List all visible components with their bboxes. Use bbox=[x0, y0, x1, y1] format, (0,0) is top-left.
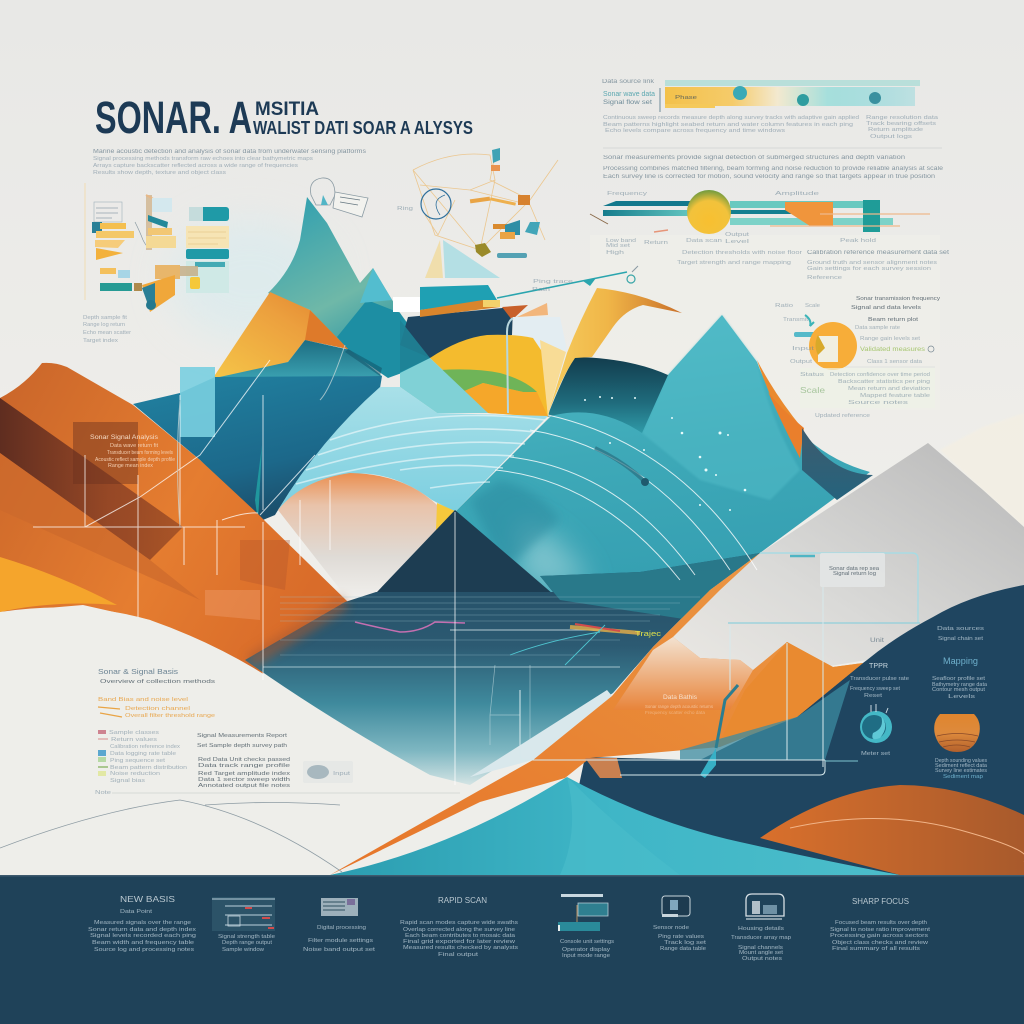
lower left text panel: Detection channel bbox=[125, 706, 190, 712]
left chart caption: Depth sample fit bbox=[83, 315, 128, 321]
title bbox=[95, 92, 473, 143]
lower centre text block: Red Target amplitude index bbox=[198, 771, 290, 777]
right column text on navy: Seafloor profile set bbox=[932, 676, 986, 682]
footer column 4: Final output bbox=[438, 952, 479, 958]
top right timeline bar: Phase bbox=[675, 95, 697, 101]
navy triangle bbox=[377, 510, 553, 594]
footer column 1: Measured signals over the range bbox=[94, 920, 191, 926]
bar labels: Amplitude bbox=[775, 191, 819, 197]
lower centre text block: Annotated output file notes bbox=[198, 783, 290, 789]
footer icon 3: dashboard: Noise band output set bbox=[303, 947, 376, 953]
orange mountain caption bbox=[90, 435, 175, 469]
lower left legend list bbox=[95, 730, 460, 796]
sonar arcs with particles bbox=[495, 396, 757, 580]
orange globe callout: Signal and data levels bbox=[851, 305, 921, 311]
upper mountain cluster bbox=[213, 197, 432, 378]
left chart caption: Range log return bbox=[83, 322, 125, 328]
sphere caption: Survey line estimates bbox=[935, 768, 987, 774]
top right timeline bar: Sonar wave data bbox=[603, 91, 655, 98]
sphere caption: Sediment map bbox=[943, 774, 983, 780]
orange mountain caption: Transducer beam forming levels bbox=[107, 450, 173, 456]
lower left text panel: Band Bias and noise level bbox=[98, 697, 188, 703]
lower left text panel: Sonar & Signal Basis bbox=[98, 667, 178, 676]
scatter thumbnail bbox=[303, 761, 353, 783]
sphere caption: Depth sounding values bbox=[935, 758, 987, 764]
orange panel caption: Data Bathis bbox=[663, 695, 697, 701]
icon: ocean sphere bbox=[934, 714, 980, 752]
footer column 4: RAPID SCAN bbox=[438, 896, 487, 905]
lower right annotation bbox=[800, 368, 935, 419]
footer column 8 bbox=[830, 897, 931, 952]
right summary text: Processing combines matched filtering, beam forming and noise reduction to provide reliable analysis at scale bbox=[603, 166, 944, 172]
footer icon 2: data screen: Signal strength table bbox=[218, 934, 275, 940]
dark scan panel bbox=[245, 553, 760, 785]
orange globe callout: Data sample rate bbox=[855, 325, 900, 331]
orange globe callout: Scale bbox=[805, 303, 820, 309]
footer icon 3: dashboard: Digital processing bbox=[317, 925, 366, 931]
footer column 4: Rapid scan modes capture wide swaths bbox=[400, 920, 518, 926]
orange globe callout: Input bbox=[792, 346, 815, 352]
network diagram bbox=[397, 148, 558, 278]
orange panel caption: Frequency scatter echo data bbox=[645, 710, 706, 715]
orange globe callout: Class 1 sensor data bbox=[867, 359, 922, 365]
lower right annotation: Source notes bbox=[848, 400, 909, 406]
footer column 8: Processing gain across sectors bbox=[830, 933, 928, 939]
right column text on navy: Mapping bbox=[943, 656, 978, 666]
bar labels: Return bbox=[644, 240, 668, 246]
footer column 1 bbox=[88, 895, 196, 953]
footer column 4: Overlap corrected along the survey line bbox=[403, 927, 515, 933]
footer icon 2: data screen: Depth range output bbox=[222, 940, 273, 946]
lower left legend list: Noise reduction bbox=[110, 771, 160, 777]
orange panel caption bbox=[645, 695, 714, 715]
lower right annotation: Status bbox=[800, 372, 825, 378]
footer icon 3: dashboard bbox=[303, 898, 376, 953]
lower left legend list: Ping sequence set bbox=[110, 758, 166, 764]
right column text on navy bbox=[932, 626, 987, 700]
title: WALIST DATI SOAR A ALYSYS bbox=[253, 118, 473, 138]
orange globe callout: Beam return plot bbox=[868, 317, 919, 323]
glass callout box bbox=[820, 553, 885, 587]
glass callout box: Sonar data rep sea bbox=[829, 566, 880, 572]
lower right annotation: Backscatter statistics per ping bbox=[838, 379, 930, 385]
footer icon 5: console bbox=[558, 894, 614, 959]
grey right panel bbox=[620, 443, 1024, 700]
intro text block: Arrays capture backscatter reflected across a wide range of frequencies bbox=[93, 163, 299, 169]
orange mountain caption: Data wave return fit bbox=[110, 443, 159, 449]
lower left legend list: Signal bias bbox=[110, 778, 146, 784]
lower right annotation: Mean return and deviation bbox=[848, 386, 930, 392]
probe arrow to ribbon bbox=[497, 266, 638, 298]
right teal mountain and central teal field bbox=[380, 315, 873, 640]
icon: gauge bbox=[860, 704, 892, 757]
footer column 1: Sonar return data and depth index bbox=[88, 927, 196, 933]
footer column 8: SHARP FOCUS bbox=[852, 897, 909, 906]
left column text on navy: Reset bbox=[864, 693, 883, 699]
deep blue shape and light rectangle bbox=[133, 367, 382, 522]
right column text on navy: Data sources bbox=[937, 626, 984, 632]
left chart caption: Target index bbox=[83, 338, 119, 344]
lower right annotation: Scale bbox=[800, 386, 826, 395]
top right paragraph: Continuous sweep records measure depth along survey tracks with adaptive gain applied bbox=[603, 115, 859, 121]
scatter thumbnail: Input bbox=[333, 771, 351, 777]
measurement lines bbox=[33, 345, 455, 785]
footer icon 3: dashboard: Filter module settings bbox=[308, 938, 373, 944]
right column text on navy: Levels bbox=[948, 694, 976, 700]
probe arrow to ribbon: Path bbox=[532, 287, 550, 293]
orange globe callout: Transmit bbox=[783, 317, 809, 323]
footer icon 5: console: Input mode range bbox=[562, 953, 610, 959]
probe arrow to ribbon: Ping trace bbox=[533, 279, 573, 285]
footer icon 7: chamber: Mount angle set bbox=[739, 950, 784, 956]
footer column 8: Focused beam results over depth bbox=[835, 920, 927, 926]
chart cluster upper left bbox=[85, 183, 229, 312]
intro text block bbox=[93, 149, 366, 176]
network diagram: Ring bbox=[397, 206, 413, 212]
navy region right bbox=[560, 585, 1024, 875]
icon: gauge: Meter set bbox=[861, 751, 891, 757]
right column text on navy: Contour mesh output bbox=[932, 687, 986, 693]
orange globe callout: Validated measures bbox=[860, 347, 925, 353]
orange globe callout: Sonar transmission frequency bbox=[856, 296, 940, 302]
title: MSITIA bbox=[255, 99, 319, 120]
bar labels: Data scan bbox=[686, 238, 722, 244]
top right paragraph: Track bearing offsets bbox=[866, 121, 937, 127]
left chart caption bbox=[83, 315, 131, 344]
bar labels: Level bbox=[725, 239, 749, 245]
orange hill bottom right bbox=[760, 785, 1024, 875]
footer icon 6: tablet: Sensor node bbox=[653, 925, 689, 931]
footer icon 5: console: Console unit settings bbox=[560, 939, 614, 945]
top right paragraph bbox=[603, 115, 938, 140]
footer column 8: Final summary of all results bbox=[832, 946, 920, 952]
orange mountain caption: Sonar Signal Analysis bbox=[90, 435, 158, 441]
lower right annotation: Mapped feature table bbox=[860, 393, 930, 399]
teal hill bottom bbox=[330, 777, 900, 875]
top right paragraph: Echo levels compare across frequency and time windows bbox=[605, 128, 786, 134]
lower right annotation: Updated reference bbox=[815, 413, 870, 419]
lower left text panel: Overview of collection methods bbox=[100, 679, 215, 685]
footer column 8: Object class checks and review bbox=[832, 940, 928, 946]
light blue wave band bbox=[278, 387, 548, 512]
white hill lower left bbox=[0, 608, 480, 875]
bar labels: Peak hold bbox=[840, 238, 876, 244]
footer icon 7: chamber: Housing details bbox=[738, 926, 784, 932]
panel labels on grey: Unit bbox=[870, 638, 884, 644]
right summary text bbox=[603, 155, 944, 180]
right column text on navy: Bathymetry range data bbox=[932, 682, 987, 688]
intro text block: Results show depth, texture and object class bbox=[93, 170, 227, 176]
yellow dome corner bbox=[436, 503, 455, 530]
lower right annotation: Detection confidence over time period bbox=[830, 372, 930, 378]
lower centre text block: Signal Measurements Report bbox=[197, 733, 288, 739]
divider bbox=[603, 147, 942, 149]
footer icon 2: data screen: Sample window bbox=[222, 947, 264, 953]
orange mountain caption: Range mean index bbox=[108, 463, 154, 469]
footer column 1: Beam width and frequency table bbox=[92, 940, 194, 946]
large orange mountain left bbox=[0, 363, 348, 680]
lower left legend list: Note bbox=[95, 790, 111, 796]
bar labels: High bbox=[606, 250, 624, 256]
lower centre text block: Data track range profile bbox=[198, 763, 290, 769]
footer icon 7: chamber: Transducer array map bbox=[731, 935, 791, 941]
bar labels bbox=[606, 191, 949, 281]
yellow dome and ribbon bbox=[400, 288, 682, 417]
bar labels: Reference bbox=[807, 275, 842, 281]
bar labels: Mid set bbox=[606, 243, 631, 249]
lower left legend list: Calibration reference index bbox=[110, 744, 181, 750]
lower centre text block: Red Data Unit checks passed bbox=[198, 757, 290, 763]
top right timeline bar: Signal flow set bbox=[603, 100, 652, 106]
footer icon 6: tablet bbox=[653, 896, 707, 952]
right summary text: Sonar measurements provide signal detection of submerged structures and depth variation bbox=[603, 155, 905, 161]
lower centre text block: Set Sample depth survey path bbox=[197, 743, 287, 749]
left column text on navy bbox=[850, 663, 909, 699]
footer band bbox=[0, 875, 1024, 1024]
footer icon 2: data screen bbox=[212, 897, 275, 953]
sphere caption: Sediment reflect data bbox=[935, 763, 987, 769]
top right paragraph: Beam patterns highlight seabed return and water column features in each ping bbox=[603, 122, 853, 128]
signal bars with sphere bbox=[590, 190, 930, 234]
left column text on navy: Frequency sweep set bbox=[850, 686, 900, 692]
lower left text panel: Overall filter threshold range bbox=[125, 713, 215, 719]
navy band with stacked stripes bbox=[393, 285, 548, 372]
top right paragraph: Range resolution data bbox=[866, 115, 938, 121]
bar labels: Gain settings for each survey session bbox=[807, 266, 931, 272]
glass frame bbox=[520, 553, 920, 775]
footer icon 7: chamber: Signal channels bbox=[738, 945, 783, 951]
left chart caption: Echo mean scatter bbox=[83, 330, 131, 336]
orange dome with fog bbox=[278, 473, 455, 602]
orange globe callout: Range gain levels set bbox=[860, 336, 921, 342]
bar labels: Ground truth and sensor alignment notes bbox=[807, 260, 938, 266]
title: SONAR. A bbox=[95, 92, 252, 143]
footer column 1: Source log and processing notes bbox=[94, 947, 194, 953]
orange diagonal band and panel mountains bbox=[330, 553, 863, 875]
lower left legend list: Beam pattern distribution bbox=[110, 765, 187, 771]
lower left legend list: Sample classes bbox=[109, 730, 160, 736]
footer column 4: Final grid exported for later review bbox=[403, 939, 515, 945]
bar labels: Output bbox=[725, 232, 750, 238]
device icon on peak bbox=[310, 178, 368, 217]
lower centre text block bbox=[197, 733, 290, 789]
right column text on navy: Signal chain set bbox=[938, 636, 984, 642]
footer column 4 bbox=[400, 896, 518, 958]
footer icon 6: tablet: Track log set bbox=[664, 940, 707, 946]
bar labels: Frequency bbox=[607, 191, 648, 197]
top right timeline bar bbox=[602, 79, 920, 112]
top right paragraph: Return amplitude bbox=[868, 127, 923, 133]
sphere caption bbox=[935, 758, 987, 780]
top right paragraph: Output logs bbox=[870, 134, 913, 140]
orange globe callout: Ratio bbox=[775, 303, 793, 309]
footer column 4: Measured results checked by analysts bbox=[403, 945, 518, 951]
footer icon 6: tablet: Ping rate values bbox=[658, 934, 704, 940]
left column text on navy: TPPR bbox=[869, 663, 888, 670]
left column text on navy: Transducer pulse rate bbox=[850, 676, 909, 682]
top right timeline bar: Data source link bbox=[602, 79, 655, 85]
bar labels: Target strength and range mapping bbox=[677, 260, 791, 266]
lower left legend list: Data logging rate table bbox=[110, 751, 176, 757]
footer icon 5: console: Operator display bbox=[562, 947, 610, 953]
bar labels: Low band bbox=[606, 238, 636, 244]
lower left text panel bbox=[98, 667, 215, 719]
bar labels: Calibration reference measurement data set bbox=[807, 250, 949, 256]
footer icon 7: chamber bbox=[731, 894, 791, 962]
lower centre text block: Data 1 sector sweep width bbox=[198, 777, 290, 783]
footer column 1: Signal levels recorded each ping bbox=[90, 933, 196, 939]
orange globe callout bbox=[775, 296, 940, 370]
intro text block: Signal processing methods transform raw echoes into clear bathymetric maps bbox=[93, 156, 314, 162]
footer column 1: Data Point bbox=[120, 909, 153, 915]
right summary text: Each survey line is corrected for motion, sound velocity and range so that targets appear in true position bbox=[603, 174, 935, 180]
white hill contour lines bbox=[0, 800, 342, 872]
white sliver along diagonal bbox=[470, 690, 612, 777]
orange mountain caption: Acoustic reflect sample depth profile bbox=[95, 457, 175, 463]
lower left legend list: Return values bbox=[111, 737, 158, 743]
footer column 1: NEW BASIS bbox=[120, 895, 175, 904]
pale backdrop shapes bbox=[170, 220, 1024, 527]
glass callout box: Signal return log bbox=[833, 571, 876, 577]
footer column 4: Each beam contributes to mosaic data bbox=[405, 933, 515, 939]
bar labels: Detection thresholds with noise floor bbox=[682, 250, 802, 256]
dark scan panel: Trajec bbox=[635, 631, 662, 638]
footer column 8: Signal to noise ratio improvement bbox=[830, 927, 931, 933]
orange panel caption: Sonar range depth acoustic returns bbox=[645, 704, 714, 709]
intro text block: Marine acoustic detection and analysis of sonar data from underwater sensing platforms bbox=[93, 149, 366, 155]
footer icon 7: chamber: Output notes bbox=[742, 956, 782, 962]
footer icon 6: tablet: Range data table bbox=[660, 946, 706, 952]
orange globe callout: Output bbox=[790, 359, 813, 365]
